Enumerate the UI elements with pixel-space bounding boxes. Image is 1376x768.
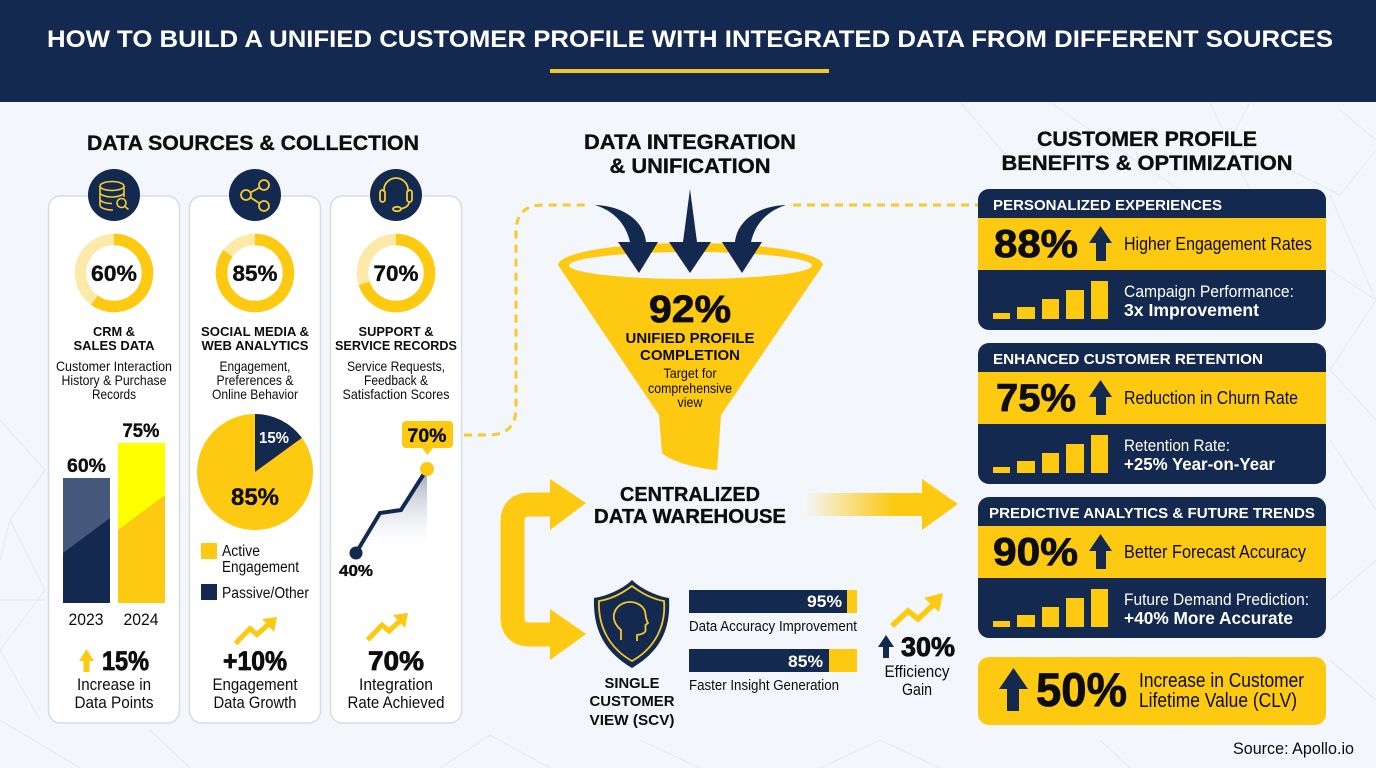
metric text: Retention Rate: — [1124, 436, 1230, 455]
mini bar chart — [993, 435, 1108, 473]
source title: SOCIAL MEDIA & — [201, 324, 309, 339]
stat: 15% increase: 15% — [102, 646, 149, 676]
funnel label — [626, 330, 754, 364]
pie chart: 85 / 15 — [197, 414, 313, 530]
metric text — [1124, 590, 1309, 628]
bar chart: 2023 vs 2024: 60% — [67, 456, 106, 477]
source description: Feedback & — [364, 372, 429, 388]
panel: enhanced customer retention — [978, 343, 1326, 484]
label: centralized data warehouse: CENTRALIZED — [620, 484, 760, 506]
source title — [201, 324, 309, 353]
stat: 90%: Better Forecast Accuracy — [1124, 542, 1306, 562]
source description: Customer Interaction — [56, 358, 172, 374]
stat: efficiency gain: Gain — [902, 680, 932, 699]
stat: 75% — [996, 377, 1298, 420]
source description: Online Behavior — [212, 386, 298, 402]
heading: data integration — [584, 130, 796, 178]
stat: +10% growth: Data Growth — [214, 693, 296, 712]
bar chart: 2023 vs 2024: 2023 — [68, 610, 104, 629]
source description: History & Purchase — [62, 372, 167, 388]
stat: 15% increase: Data Points — [74, 693, 154, 712]
source description: Service Requests, — [347, 358, 445, 374]
stat: 15% increase — [74, 646, 154, 712]
metric text — [1124, 282, 1294, 320]
arrows into funnel — [595, 189, 786, 273]
stat: 70% integration: 70% — [368, 646, 424, 676]
callout: customer lifetime value: Increase in Customer — [1139, 670, 1304, 692]
icon: headset — [370, 169, 422, 221]
stat: 70% integration: Rate Achieved — [348, 693, 444, 712]
label: single customer view: VIEW (SCV) — [590, 712, 674, 729]
callout: customer lifetime value: Lifetime Value (CLV) — [1139, 690, 1297, 712]
label: centralized data warehouse: DATA WAREHOUSE — [594, 506, 786, 528]
funnel note: Target for — [664, 365, 717, 381]
stat: 70% integration: Integration — [359, 675, 433, 694]
progress bar: faster insight: 85% — [788, 652, 823, 671]
title: HOW TO BUILD A UNIFIED CUSTOMER PROFILE WITH INTEGRATED DATA FROM DIFFERENT SOURCES — [47, 26, 1333, 53]
source title: SUPPORT & — [358, 324, 434, 339]
donut: 70%: 70% — [374, 261, 418, 286]
metric text — [1124, 436, 1275, 474]
stat: efficiency gain: 30% — [901, 632, 955, 662]
label: single customer view: SINGLE — [604, 675, 660, 692]
panel: predictive analytics — [978, 497, 1326, 638]
metric text: Future Demand Prediction: — [1124, 590, 1309, 609]
icon: shield with head — [594, 580, 669, 668]
donut: 60% — [80, 240, 148, 306]
line chart: 40% to 70%: 70% — [408, 426, 447, 447]
icon: database search — [88, 169, 140, 221]
metric text: +25% Year-on-Year — [1124, 454, 1275, 474]
label: single customer view: CUSTOMER — [590, 693, 675, 710]
progress bar: data accuracy — [689, 590, 858, 635]
icon: share nodes — [229, 169, 281, 221]
label: centralized data warehouse — [594, 484, 786, 528]
pie chart: 85 / 15: 15% — [259, 430, 289, 447]
metric text: +40% More Accurate — [1124, 608, 1293, 628]
donut: 70% — [362, 240, 430, 306]
source title — [335, 324, 457, 353]
arrow: C-shaped loop — [512, 479, 586, 660]
dashed connector: right — [793, 204, 978, 206]
bar chart: 2023 vs 2024: 2024 — [124, 610, 158, 629]
label: single customer view — [590, 675, 675, 729]
donut: 85% — [222, 240, 288, 306]
legend: Active — [222, 543, 260, 560]
metric text: Campaign Performance: — [1124, 282, 1294, 301]
bar chart: 2023 vs 2024: 75% — [122, 421, 160, 442]
callout: customer lifetime value: 50% — [1036, 663, 1127, 716]
progress bar: data accuracy: 95% — [807, 592, 842, 611]
stat: 90%: 90% — [993, 531, 1078, 574]
legend — [201, 543, 309, 602]
source note: Source: Apollo.io — [1233, 739, 1354, 758]
legend: Engagement — [222, 559, 300, 576]
panel: social media and web analytics — [190, 169, 320, 723]
stat: 75%: 75% — [996, 377, 1076, 420]
pie chart: 85 / 15: 85% — [231, 484, 279, 511]
source description: Records — [92, 386, 136, 402]
source title: WEB ANALYTICS — [202, 338, 309, 353]
stat: 88%: Higher Engagement Rates — [1124, 234, 1312, 254]
heading: data integration: & UNIFICATION — [610, 154, 770, 178]
panel: personalized experiences — [978, 189, 1326, 330]
stat: 70% integration — [348, 646, 444, 712]
source description: Satisfaction Scores — [342, 386, 450, 402]
stat: 88%: 88% — [994, 223, 1078, 266]
source title: SALES DATA — [74, 338, 155, 353]
source description — [56, 358, 172, 402]
panel heading: ENHANCED CUSTOMER RETENTION — [993, 351, 1263, 368]
dashed connector: left — [464, 205, 590, 435]
stat: 15% increase: Increase in — [77, 675, 151, 694]
funnel label: COMPLETION — [640, 347, 740, 364]
stat: +10% growth: Engagement — [212, 675, 298, 694]
funnel note: view — [678, 394, 703, 410]
metric text: 3x Improvement — [1124, 300, 1259, 320]
icon: trend arrow — [236, 617, 277, 644]
progress bar: faster insight: Faster Insight Generation — [689, 677, 839, 694]
stat: +10% growth: +10% — [223, 646, 287, 676]
bar chart: 2023 vs 2024 — [63, 421, 165, 629]
funnel label: UNIFIED PROFILE — [626, 330, 754, 347]
heading: data sources: DATA SOURCES & COLLECTION — [87, 131, 419, 155]
callout: customer lifetime value — [978, 657, 1326, 725]
progress bar: data accuracy: Data Accuracy Improvement — [689, 618, 858, 635]
progress bar: faster insight — [689, 649, 857, 694]
panel: support and service records — [330, 169, 462, 723]
source title: CRM & — [93, 324, 135, 339]
panel: CRM and sales data — [48, 169, 180, 723]
stat: +10% growth — [212, 646, 298, 712]
stat: efficiency gain: Efficiency — [884, 662, 950, 681]
source description: Engagement, — [220, 358, 290, 374]
header banner — [0, 0, 1376, 102]
icon: trend arrow — [892, 593, 943, 626]
line chart: 40% to 70%: 40% — [339, 563, 373, 580]
mini bar chart — [993, 281, 1108, 319]
donut: 60%: 60% — [91, 261, 137, 286]
funnel — [558, 243, 823, 470]
source description: Preferences & — [216, 372, 294, 388]
donut: 85%: 85% — [232, 261, 278, 286]
heading: customer profile benefits: BENEFITS & OPTIMIZATION — [1002, 151, 1292, 175]
source title — [74, 324, 155, 353]
funnel note: comprehensive — [648, 380, 732, 396]
heading: data integration: DATA INTEGRATION — [584, 130, 796, 154]
icon: trend arrow — [368, 613, 408, 640]
arrow: warehouse to benefits — [805, 479, 958, 530]
panel heading: PERSONALIZED EXPERIENCES — [993, 197, 1222, 214]
funnel note — [648, 365, 732, 410]
line chart: 40% to 70% — [339, 421, 453, 580]
mini bar chart — [993, 589, 1108, 627]
source description — [342, 358, 450, 402]
source title: SERVICE RECORDS — [335, 338, 457, 353]
heading: customer profile benefits — [1002, 127, 1292, 175]
funnel stat: 92% — [649, 289, 731, 331]
source description — [212, 358, 298, 402]
stat: 88% — [994, 223, 1312, 266]
panel heading: PREDICTIVE ANALYTICS & FUTURE TRENDS — [989, 505, 1315, 522]
stat: 75%: Reduction in Churn Rate — [1124, 388, 1298, 408]
stat: 90% — [993, 531, 1306, 574]
heading: customer profile benefits: CUSTOMER PROFILE — [1037, 127, 1257, 151]
stat: efficiency gain — [878, 632, 955, 699]
legend: Passive/Other — [222, 585, 309, 602]
